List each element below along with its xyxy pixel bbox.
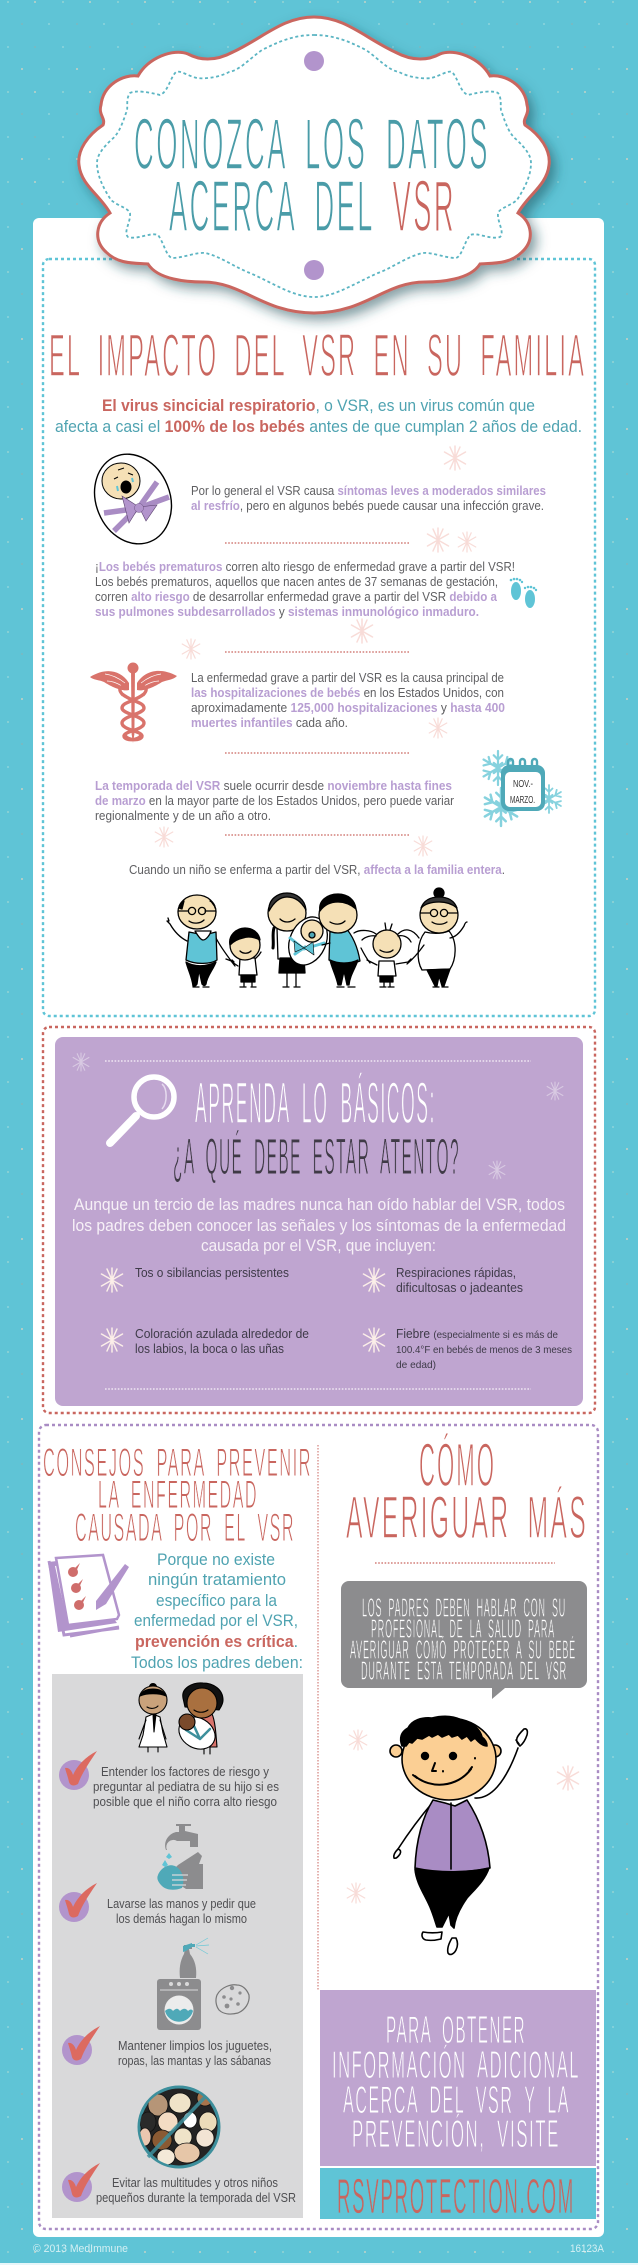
text: prevention intro: específico para la (156, 1592, 278, 1610)
text: tip 4 (96, 2175, 296, 2205)
text: CAUSADA POR EL VSR (75, 1506, 295, 1550)
symptoms: Tos o sibilancias persistentes (135, 1265, 289, 1280)
text: season: regionalmente y de un año a otro. (95, 808, 271, 823)
icon: cleaning items (157, 1938, 249, 2030)
text: hospitalizations (191, 670, 505, 730)
text: season: La temporada del VSR suele ocurrir desde noviembre hasta fines (95, 778, 452, 793)
symptoms: Coloración azulada alrededor de (135, 1326, 309, 1341)
grandpa (167, 895, 235, 987)
icon: winter calendar (484, 751, 561, 826)
title badge (79, 17, 549, 313)
text: tip 1: preguntar al pediatra de su hijo si es (93, 1779, 279, 1794)
intro text: El virus sincicial respiratorio, o VSR, es un virus común que (102, 397, 535, 415)
panel: impact border (43, 259, 595, 1016)
text: basics intro: los padres deben conocer las señales y los síntomas de la enfermedad (72, 1217, 566, 1235)
symptoms: Fiebre (especialmente si es más de (396, 1326, 558, 1341)
text: mild symptoms (191, 483, 546, 513)
text: tip 1: posible que el niño corra alto riesgo (93, 1794, 277, 1809)
text: prevention intro: ningún tratamiento (148, 1571, 286, 1589)
intro text: afecta a casi el 100% de los bebés antes de que cumplan 2 años de edad. (55, 418, 582, 436)
text: tip 3 (118, 2038, 272, 2068)
text: hospitalizations: La enfermedad grave a partir del VSR es la causa principal de (191, 670, 504, 685)
panel: basics border (43, 1027, 595, 1413)
text: tip 2: los demás hagan lo mismo (116, 1911, 247, 1926)
text: tip 4: pequeños durante la temporada del VSR (96, 2190, 296, 2205)
father (319, 894, 370, 987)
text: season: de marzo en la mayor parte de los Estados Unidos, pero puede variar (95, 793, 455, 808)
check 2 (59, 1883, 97, 1922)
check 1 (59, 1751, 97, 1790)
intro text (55, 397, 582, 436)
text: tip 4: Evitar las multitudes y otros niños (112, 2175, 278, 2190)
symptoms: dificultosas o jadeantes (396, 1280, 523, 1295)
decorative stars (114, 446, 578, 2013)
title text (134, 105, 490, 247)
text: basics intro (72, 1196, 566, 1255)
icon: crying baby (81, 442, 185, 556)
heading: prevention tips: LA ENFERMEDAD (98, 1473, 258, 1517)
icon: winter calendar: MARZO. (510, 795, 535, 806)
text: prevention intro (131, 1551, 303, 1672)
text: hospitalizations: aproximadamente 125,000 hospitalizaciones y hasta 400 (191, 700, 505, 715)
text: tip 1: Entender los factores de riesgo y (101, 1764, 270, 1779)
icon: magnifier (110, 1077, 174, 1143)
text: prevention intro: enfermedad por el VSR, (134, 1612, 298, 1630)
text: premature babies: Los bebés prematuros, aquellos que nacen antes de 37 semanas de gestación, (95, 574, 498, 589)
icon: checklist (48, 1555, 129, 1636)
mother (268, 893, 306, 987)
illustration: family (167, 888, 467, 987)
panel: gray tips list (52, 1674, 303, 2218)
icon: faucet and hands (157, 1824, 203, 1890)
heading: prevention tips (43, 1441, 312, 1550)
icon: crowd crossed out (139, 2087, 219, 2167)
text: tip 2 (107, 1896, 256, 1926)
panel: basics (55, 1037, 583, 1406)
symptoms: 100.4°F en bebés de menos de 3 meses (396, 1344, 572, 1356)
text: mild symptoms: al resfrío, pero en algunos bebés puede causar una infección grave. (191, 498, 544, 513)
check 4 (62, 2163, 100, 2202)
text: tip 2: Lavarse las manos y pedir que (107, 1896, 256, 1911)
text: hospitalizations: las hospitalizaciones de bebés en los Estados Unidos, con (191, 685, 504, 700)
text: premature babies: corren alto riesgo de desarrollar enfermedad grave a partir del VSR debido a (95, 589, 498, 604)
heading: how to learn more (346, 1431, 588, 1551)
heading: basics (173, 1071, 460, 1185)
icon: caduceus (90, 662, 177, 743)
text: prevention intro: Porque no existe (157, 1551, 275, 1569)
text: premature babies: sus pulmones subdesarrollados y sistemas inmunológico inmaduro. (95, 604, 479, 619)
text: prevention intro: prevención es crítica. (135, 1633, 298, 1651)
symptoms: de edad) (396, 1359, 436, 1371)
text: hospitalizations: muertes infantiles cada año. (191, 715, 348, 730)
illustration: smiling man (390, 1716, 527, 1954)
symptoms: los labios, la boca o las uñas (135, 1341, 284, 1356)
text: premature babies (95, 559, 515, 619)
text: tip 1 (93, 1764, 279, 1809)
text: basics intro: causada por el VSR, que incluyen: (201, 1237, 436, 1255)
girl (354, 923, 419, 987)
panel: white page (33, 218, 604, 2237)
text: prevention intro: Todos los padres deben: (131, 1654, 303, 1672)
symptoms (102, 1265, 572, 1371)
footer: copyright: © 2013 MedImmune (33, 2243, 128, 2255)
icon: winter calendar: NOV.- (513, 779, 533, 790)
icon: footprints (510, 578, 537, 608)
text: basics intro: Aunque un tercio de las madres nunca han oído hablar del VSR, todos (74, 1196, 565, 1214)
text: tip 3: ropas, las mantas y las sábanas (118, 2053, 271, 2068)
text: premature babies: ¡Los bebés prematuros corren alto riesgo de enfermedad grave a partir del VSR! (95, 559, 515, 574)
footer: code: 16123A (570, 2243, 605, 2255)
text: mild symptoms: Por lo general el VSR causa síntomas leves a moderados similares (191, 483, 546, 498)
symptoms: Respiraciones rápidas, (396, 1265, 516, 1280)
heading: how to learn more: CÓMO (419, 1431, 496, 1499)
boy (226, 928, 261, 987)
panel: more info (320, 1990, 596, 2166)
check 3 (62, 2026, 100, 2065)
grandmother (407, 888, 467, 987)
icon: doctor and mother (139, 1683, 223, 1755)
wrapped baby (281, 911, 335, 971)
text: tip 3: Mantener limpios los juguetes, (118, 2038, 272, 2053)
text: family: Cuando un niño se enferma a partir del VSR, affecta a la familia entera. (129, 862, 505, 877)
panel: tips border (39, 1425, 598, 2229)
text: season (95, 778, 455, 823)
speech bubble (341, 1581, 587, 1699)
